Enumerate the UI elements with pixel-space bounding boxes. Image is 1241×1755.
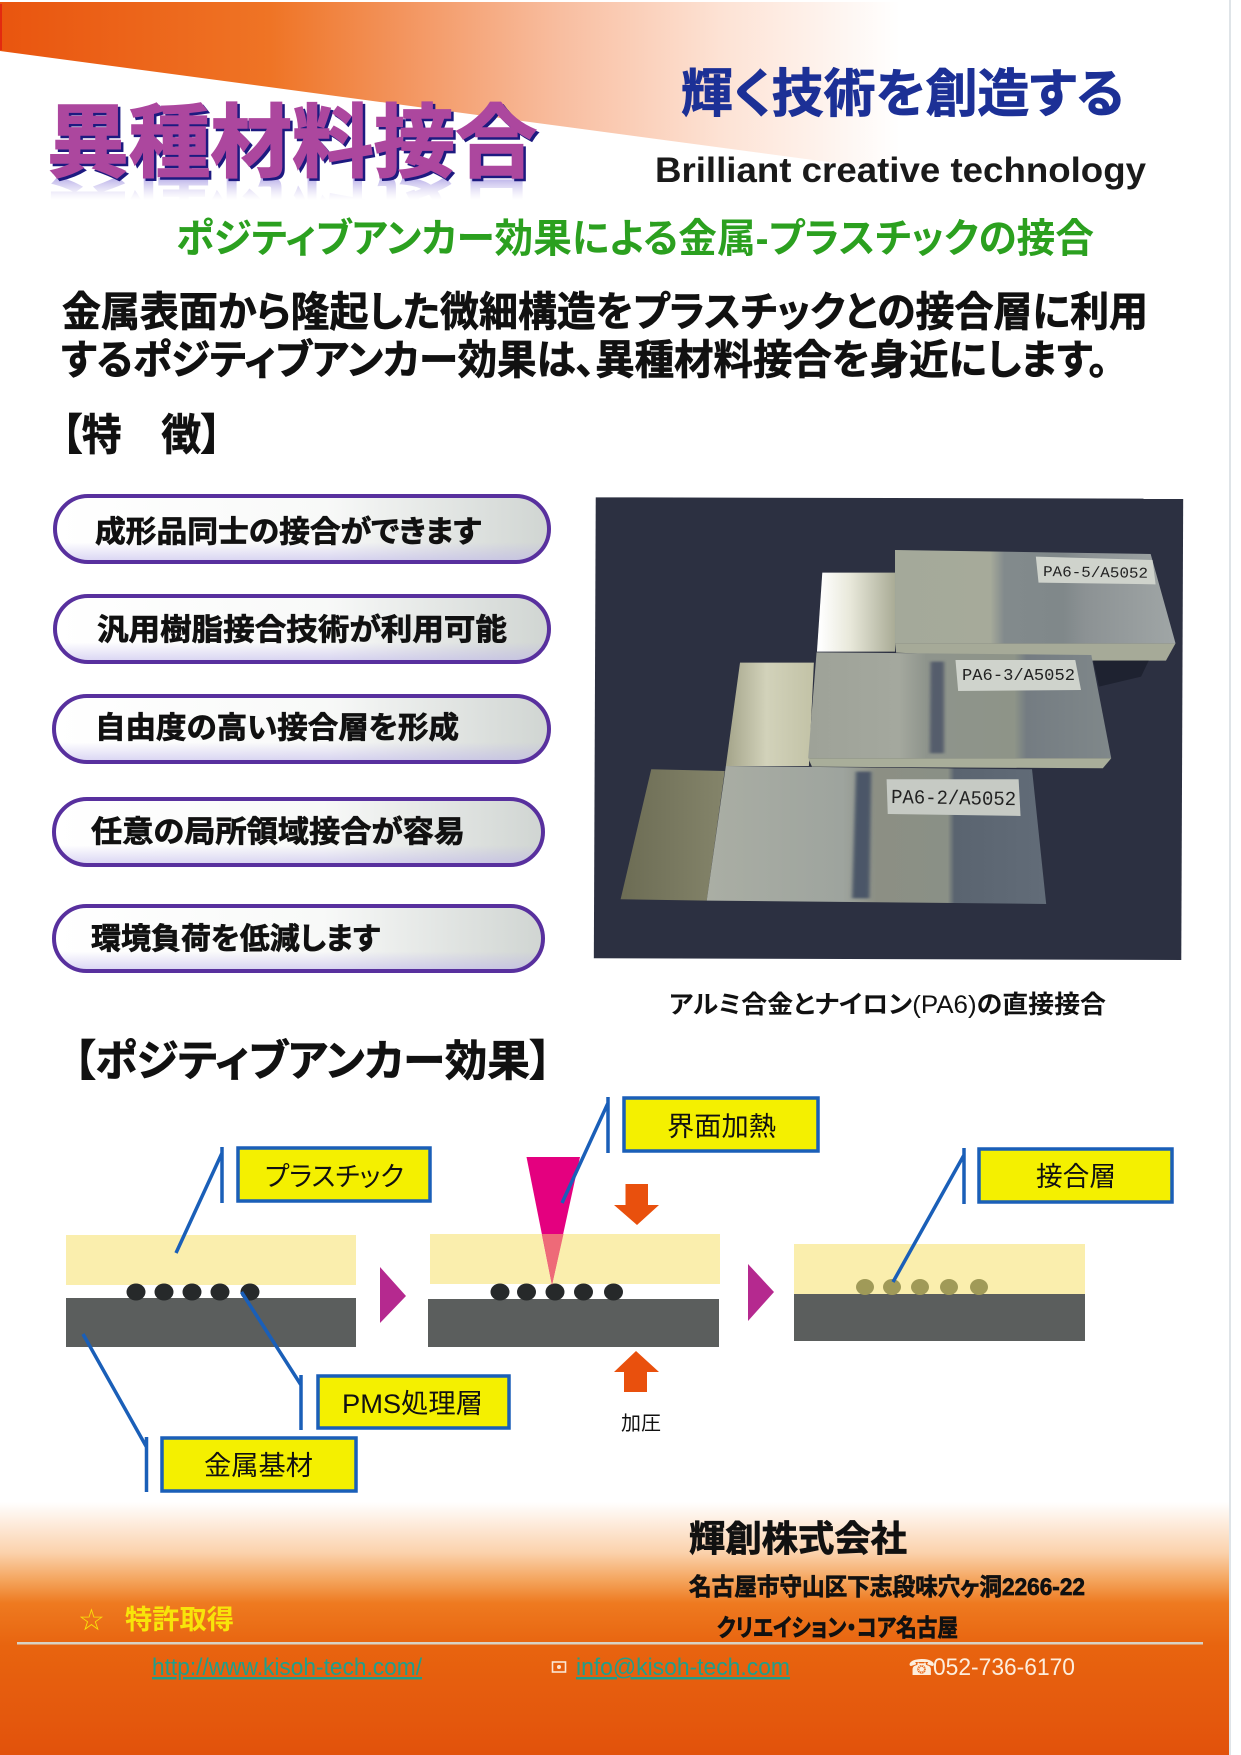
website link: http://www.kisoh-tech.com/ xyxy=(152,1654,422,1681)
sample label PA6-3: PA6-3/A5052 xyxy=(962,667,1075,686)
pill 3 xyxy=(54,696,549,762)
intro text block: するポジティブアンカー効果は、異種材料接合を身近にします。 xyxy=(61,337,1108,383)
patent note xyxy=(78,1603,234,1638)
sample label PA6-2: PA6-2/A5052 xyxy=(891,787,1016,812)
callout: PMS layer: PMS処理層 xyxy=(342,1389,483,1419)
callout: metal base xyxy=(83,1334,356,1492)
step 2: interface heating and pressure xyxy=(428,1157,720,1435)
top gradient banner xyxy=(0,2,1000,185)
sample label PA6-5: PA6-5/A5052 xyxy=(1043,564,1148,583)
laser beam xyxy=(526,1157,580,1285)
title: 異種材料接合: 異種材料接合 xyxy=(47,160,537,276)
title: 異種材料接合: 異種材料接合 xyxy=(47,78,537,194)
footer band xyxy=(0,1502,1229,1755)
icon: mail xyxy=(552,1662,566,1672)
title: 異種材料接合: 異種材料接合 xyxy=(50,81,540,197)
arrow: step 1 to 2 xyxy=(380,1267,406,1323)
building name: クリエイション・コア名古屋 xyxy=(717,1615,958,1642)
callout: bonded layer: 接合層 xyxy=(1036,1162,1116,1192)
pill 2: 汎用樹脂接合技術が利用可能 xyxy=(97,613,507,647)
patent note: 特許取得 xyxy=(125,1605,234,1635)
arrow: pressure up xyxy=(614,1351,659,1392)
heading: 特徴: 【特 徴】 xyxy=(62,412,221,460)
right page edge xyxy=(1229,0,1231,1755)
pill 2 xyxy=(55,596,549,662)
pill 5 xyxy=(54,906,543,971)
photo: bonded sample plates xyxy=(594,497,1183,960)
arrow: step 2 to 3 xyxy=(748,1264,774,1321)
pill 5: 環境負荷を低減します xyxy=(91,923,381,956)
photo caption: アルミ合金とナイロン (PA6)の直接接合 xyxy=(669,991,1106,1019)
diagram: process steps xyxy=(66,1157,1085,1435)
callout: interface heating: 界面加熱 xyxy=(667,1112,776,1142)
panel: feature pills xyxy=(54,496,549,971)
email link: info@kisoh-tech.com xyxy=(576,1654,790,1681)
pill 4: 任意の局所領域接合が容易 xyxy=(91,815,465,849)
callout: plastic xyxy=(176,1147,430,1253)
english tagline: Brilliant creative technology xyxy=(655,151,1147,190)
callout: interface heating xyxy=(562,1097,818,1203)
callout: metal base: 金属基材 xyxy=(204,1451,313,1481)
step 1: before bonding xyxy=(66,1235,356,1347)
intro text block: 金属表面から隆起した微細構造をプラスチックとの接合層に利用 xyxy=(62,289,1148,335)
phone number: ☎ xyxy=(908,1656,935,1681)
step 3: bonded layer xyxy=(794,1244,1085,1341)
pill 3: 自由度の高い接合層を形成 xyxy=(95,712,459,745)
pressure label: 加圧 xyxy=(621,1412,661,1435)
tagline: 輝く技術を創造する: 輝く技術を創造する xyxy=(681,66,1124,124)
phone number: 052-736-6170 xyxy=(933,1654,1075,1681)
pill 4 xyxy=(54,799,543,865)
company name: 輝創株式会社 xyxy=(689,1518,907,1559)
address: 名古屋市守山区下志段味穴ヶ洞2266-22 xyxy=(689,1574,1085,1601)
callout: plastic: プラスチック xyxy=(265,1162,404,1192)
pill 1 xyxy=(55,496,549,562)
subtitle: ポジティブアンカー効果による金属-プラスチックの接合 xyxy=(176,217,1094,261)
callout: PMS layer xyxy=(242,1292,509,1430)
callout: bonded layer xyxy=(893,1148,1172,1282)
pill 1: 成形品同士の接合ができます xyxy=(95,515,482,549)
patent note: ☆ xyxy=(78,1603,105,1638)
intro text block xyxy=(61,289,1148,383)
heading: positive anchor effect: 【ポジティブアンカー効果】 xyxy=(74,1038,551,1086)
arrow: pressure down xyxy=(614,1184,659,1225)
